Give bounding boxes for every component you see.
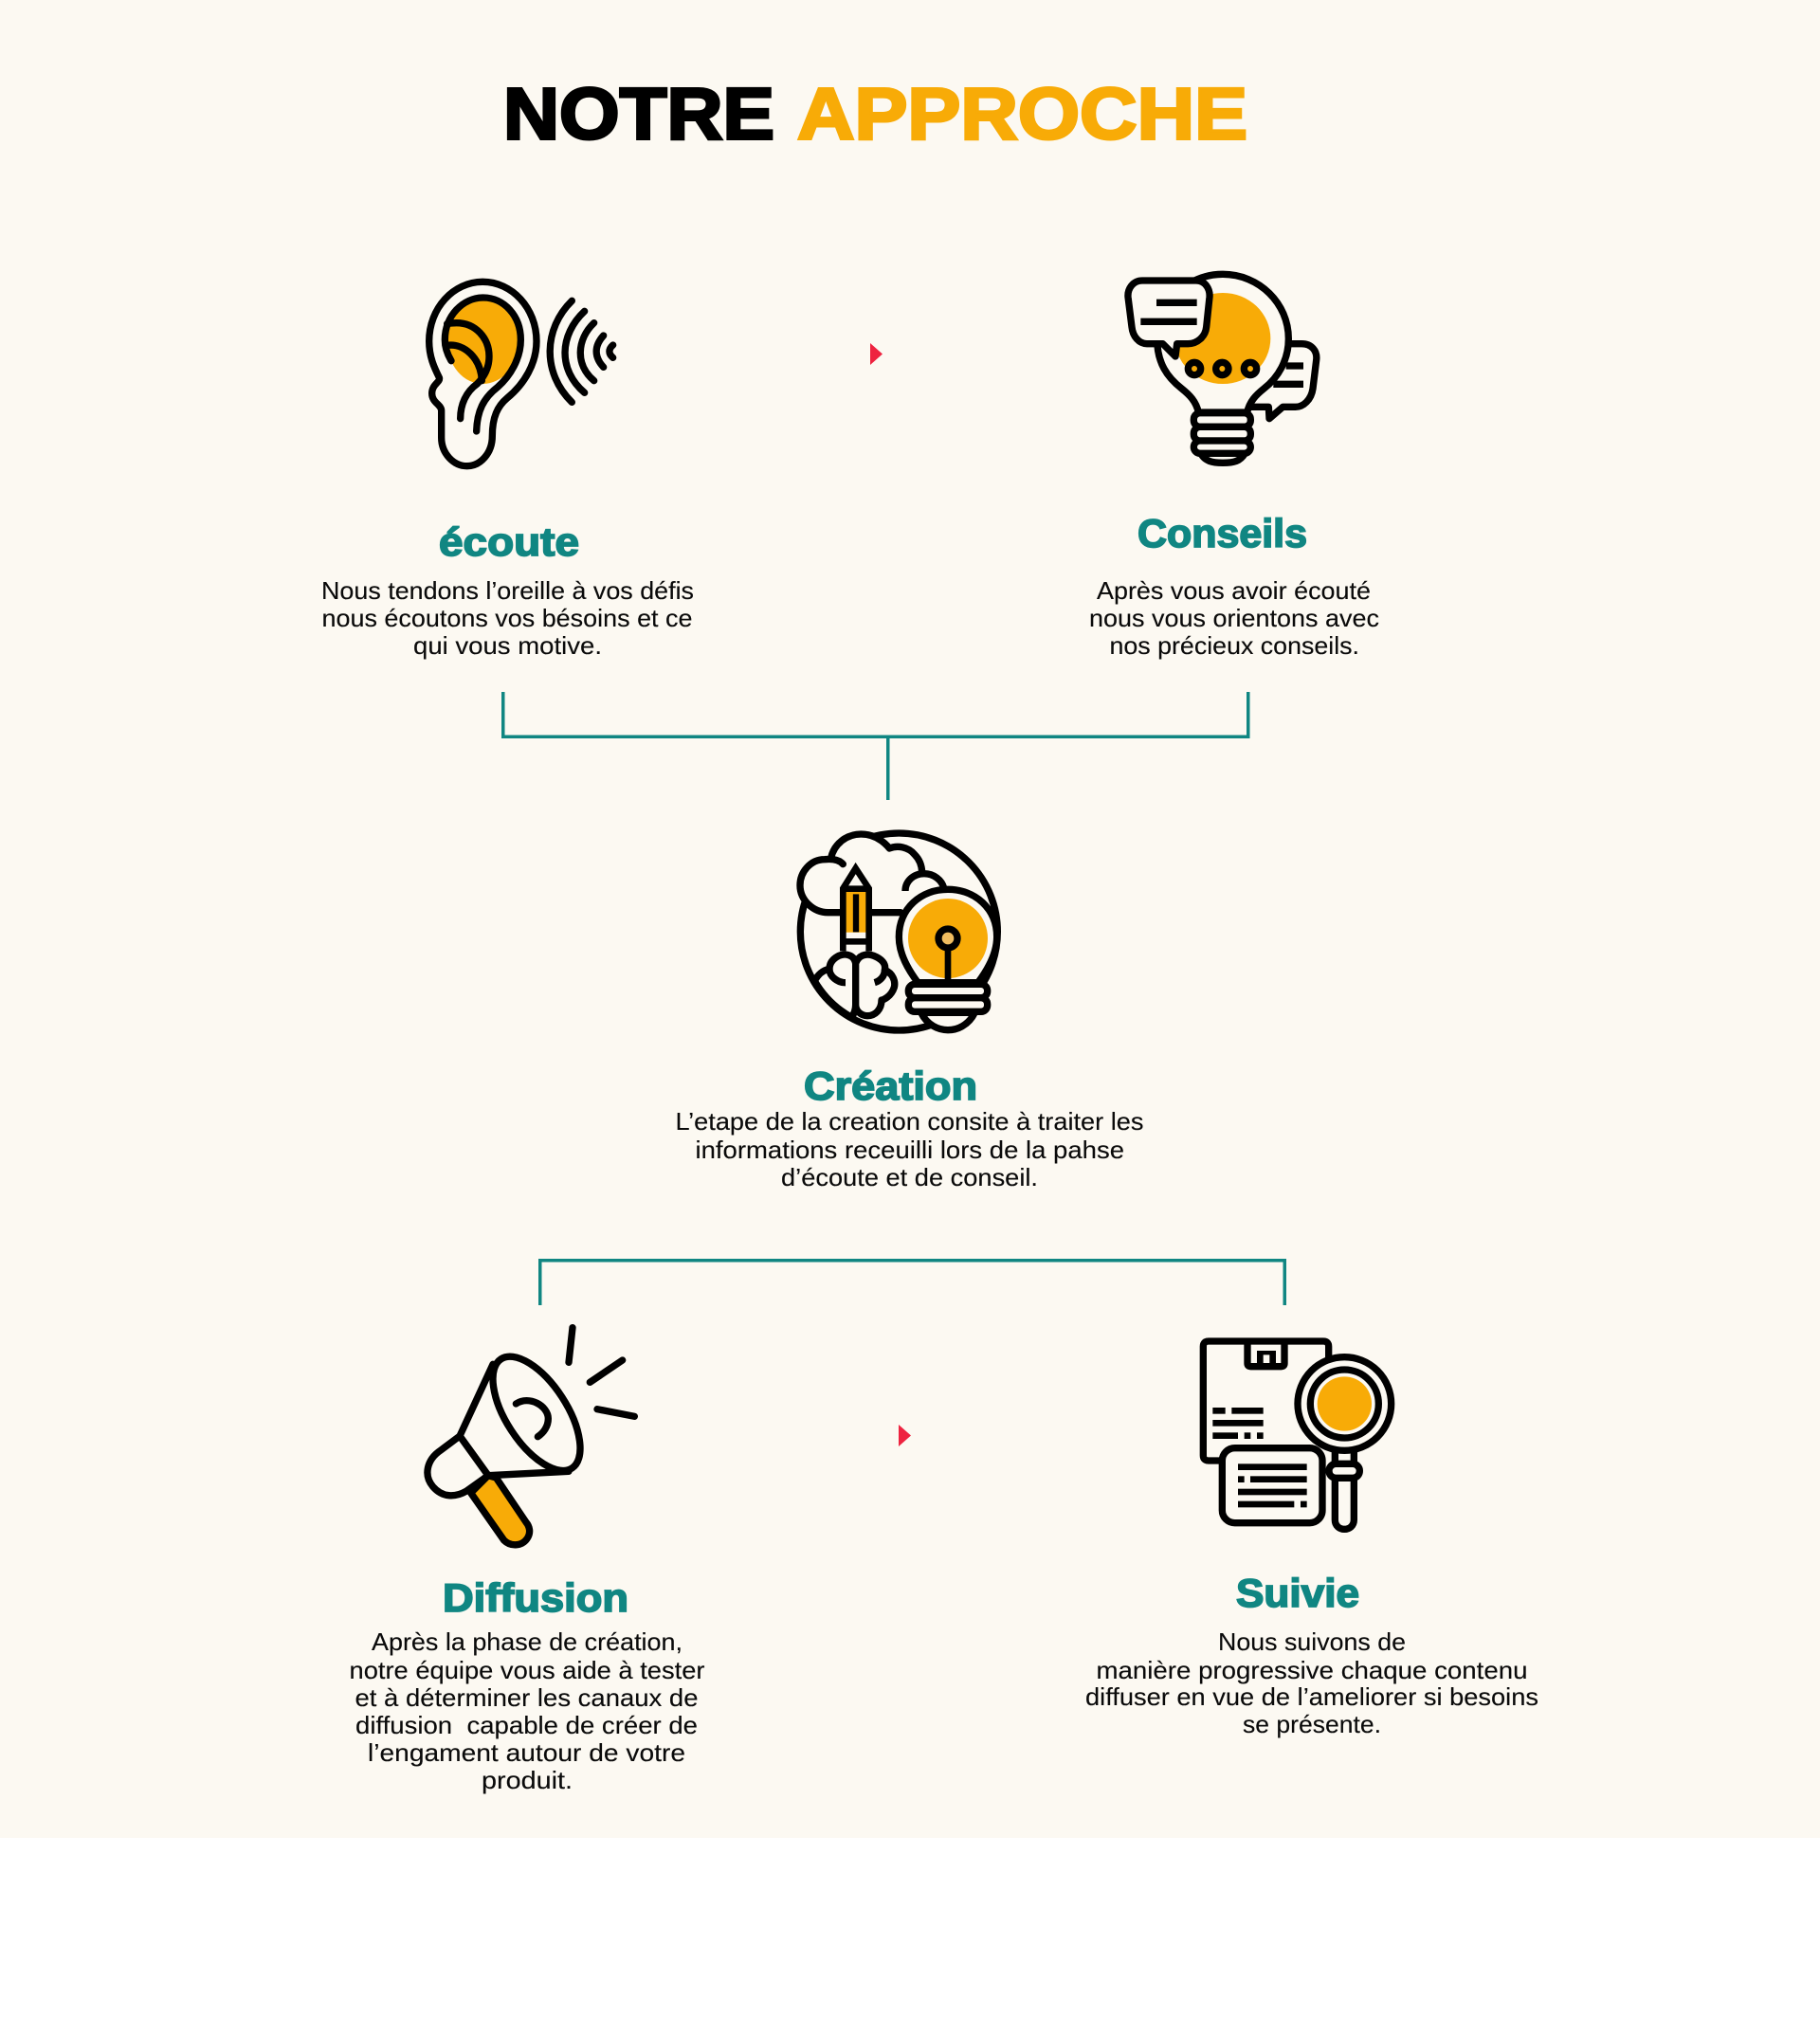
connector: top bracket	[501, 692, 1249, 800]
heading: diffusion: Diffusion	[443, 1575, 628, 1620]
connector: bottom bracket	[538, 1259, 1286, 1305]
text block: écoute	[321, 576, 694, 660]
title: NOTRE	[503, 74, 774, 155]
text block: suivie	[1085, 1627, 1538, 1738]
text block: suivie: se présente.	[1243, 1710, 1381, 1738]
text block: conseils: Après vous avoir écouté	[1097, 576, 1371, 605]
text block: diffusion	[349, 1627, 705, 1794]
arrow: diffusion to suivie	[899, 1425, 911, 1446]
text block: diffusion: l’engament autour de votre	[368, 1738, 685, 1767]
panel: diffusion	[349, 1328, 705, 1794]
heading: écoute: écoute	[439, 519, 579, 564]
text block: écoute: Nous tendons l’oreille à vos défis	[321, 576, 694, 605]
text block: diffusion: notre équipe vous aide à tester	[349, 1656, 705, 1684]
panel: écoute	[321, 282, 694, 660]
heading: création: Création	[804, 1063, 977, 1108]
text block: suivie: Nous suivons de	[1218, 1627, 1406, 1656]
icon: light bulb with speech bubbles	[1128, 274, 1317, 463]
title: APPROCHE	[797, 74, 1247, 155]
panel: création	[675, 833, 1143, 1191]
text block: suivie: diffuser en vue de l’ameliorer si besoins	[1085, 1682, 1538, 1711]
title	[503, 74, 1247, 155]
text block: création	[675, 1107, 1143, 1191]
text block: conseils: nos précieux conseils.	[1109, 631, 1359, 660]
icon: brain, pencil, cloud and bulb	[800, 833, 997, 1030]
icon: megaphone	[428, 1328, 634, 1545]
heading: conseils: Conseils	[1138, 511, 1307, 555]
text block: écoute: qui vous motive.	[413, 631, 602, 660]
text block: création: informations receuilli lors de la pahse	[696, 1136, 1124, 1164]
text block: écoute: nous écoutons vos bésoins et ce	[322, 604, 692, 632]
panel: conseils	[1089, 274, 1379, 660]
arrow: écoute to conseils	[870, 343, 883, 365]
heading: suivie: Suivie	[1236, 1571, 1359, 1615]
text block: suivie: manière progressive chaque contenu	[1096, 1656, 1528, 1684]
text block: diffusion: Après la phase de création,	[372, 1627, 682, 1656]
text block: diffusion: produit.	[482, 1766, 573, 1794]
text block: conseils	[1089, 576, 1379, 660]
text block: diffusion: diffusion capable de créer de	[355, 1711, 698, 1739]
text block: conseils: nous vous orientons avec	[1089, 604, 1379, 632]
icon: ear with sound waves	[429, 282, 613, 466]
text block: création: L’etape de la creation consite à traiter les	[675, 1107, 1143, 1136]
text block: création: d’écoute et de conseil.	[781, 1163, 1038, 1191]
text block: diffusion: et à déterminer les canaux de	[355, 1683, 698, 1712]
icon: parcel and magnifying glass	[1203, 1341, 1392, 1529]
panel: suivie	[1085, 1341, 1538, 1738]
